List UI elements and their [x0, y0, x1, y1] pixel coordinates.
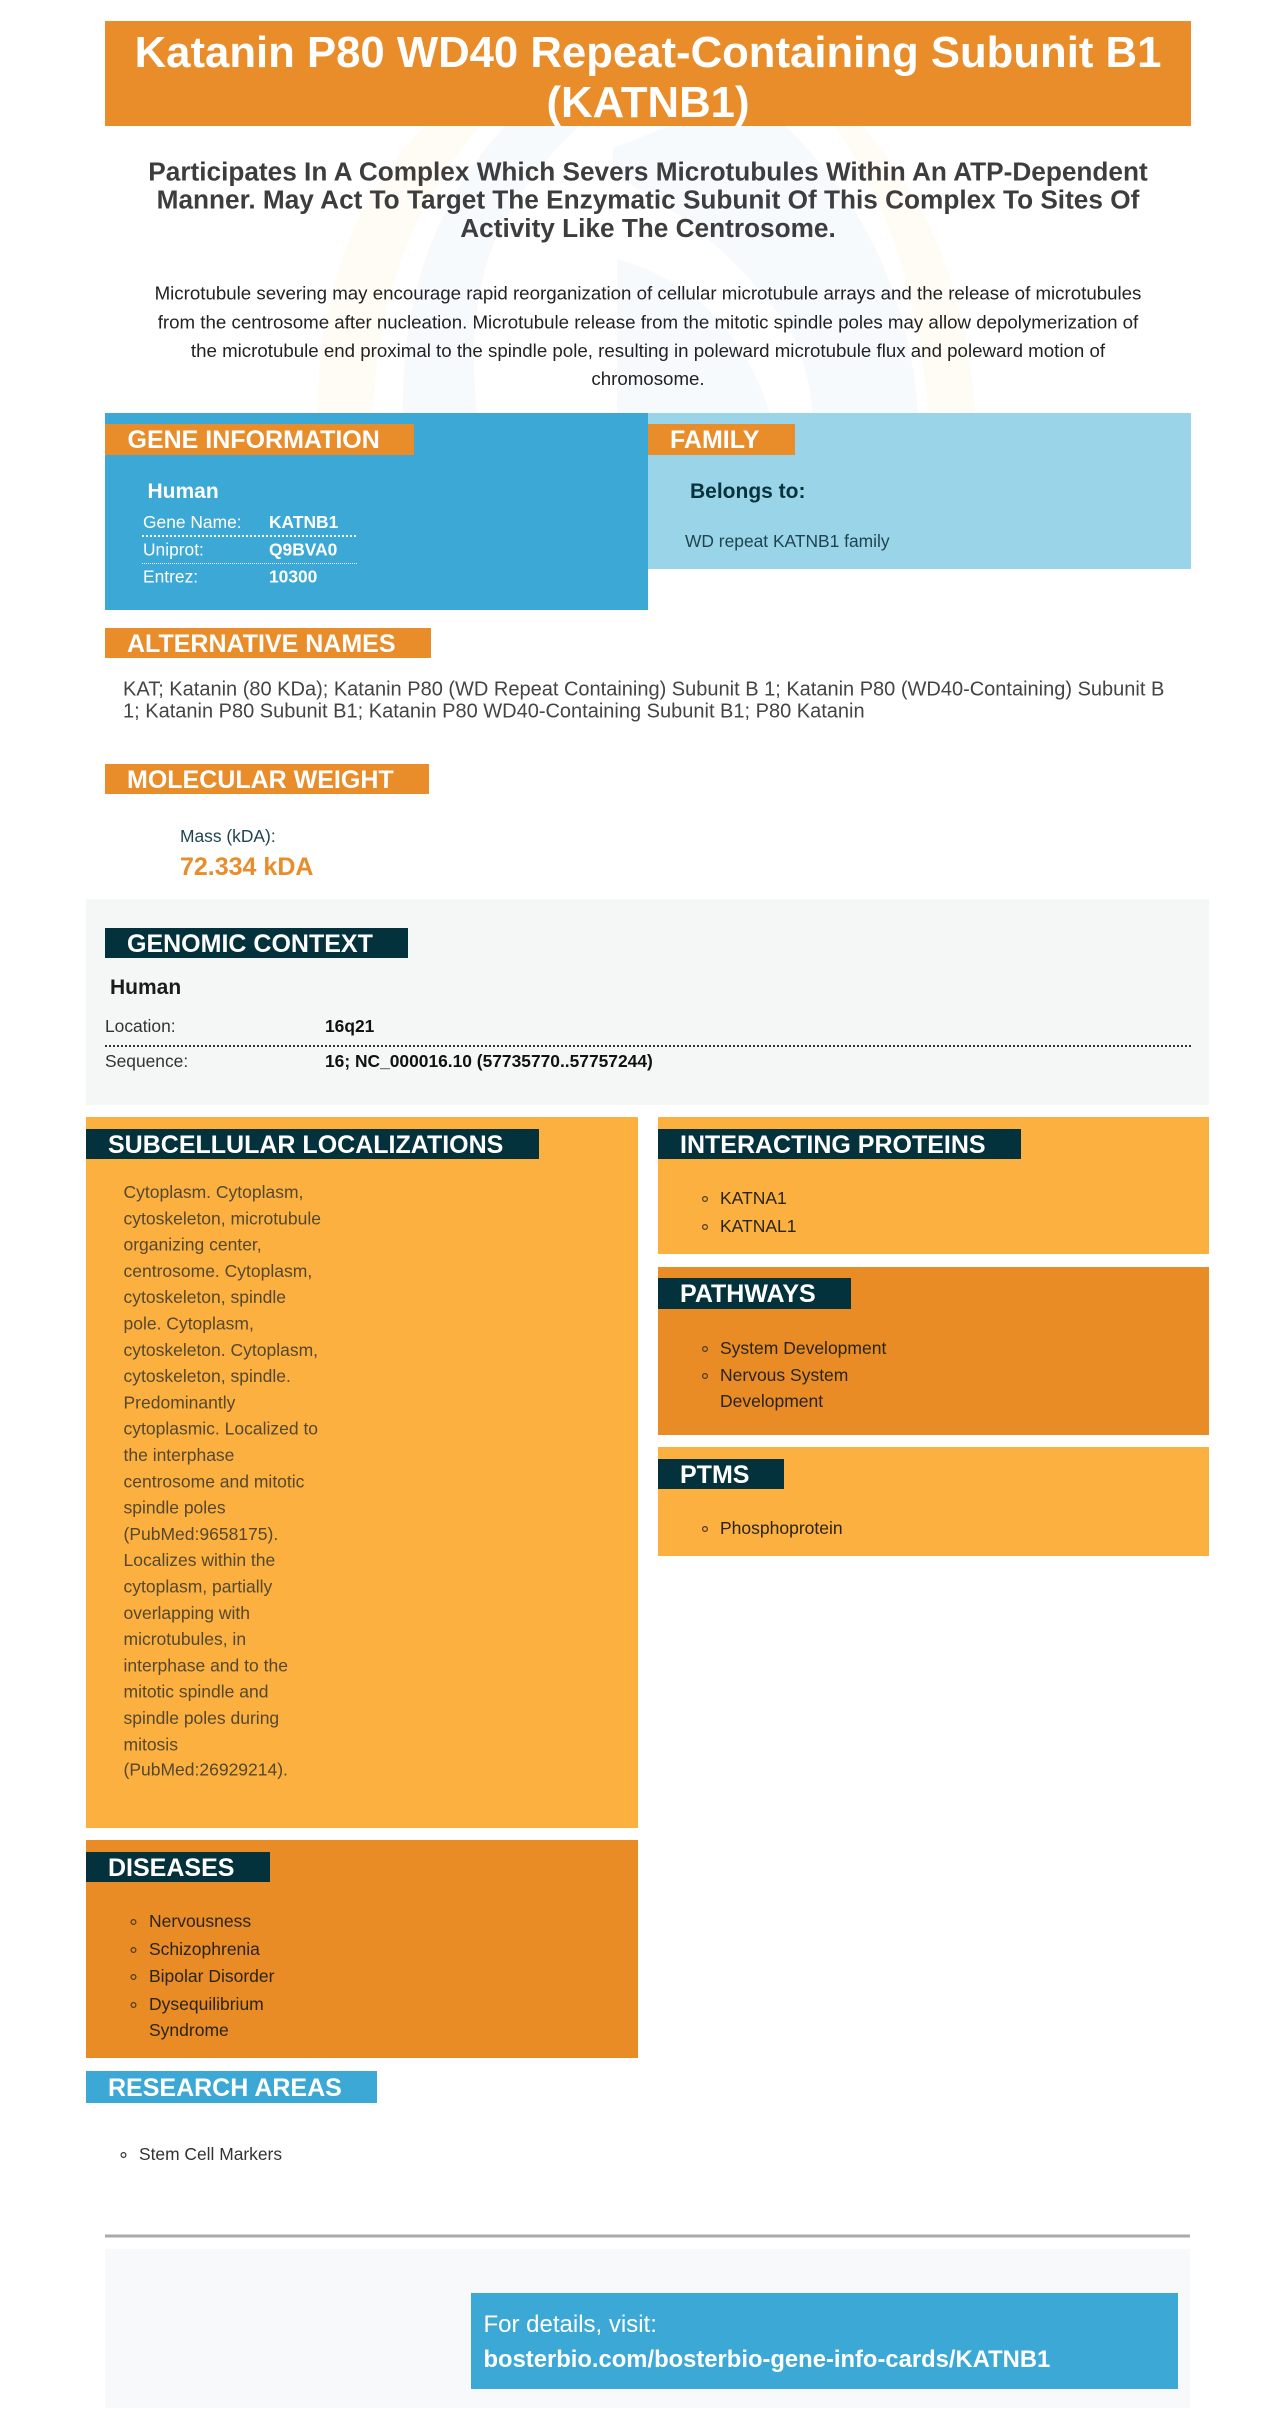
description text: Microtubule severing may encourage rapid reorganization of cellular microtubule arrays and the release of microtubules: [155, 282, 1141, 304]
heading: interacting proteins: INTERACTING PROTEINS: [680, 1131, 986, 1159]
heading: family: FAMILY: [670, 426, 760, 454]
callout: details link: bosterbio.com/bosterbio-gene-info-cards/KATNB1: [484, 2346, 1050, 2373]
localization text: the interphase: [124, 1445, 234, 1465]
heading: subcellular localizations: SUBCELLULAR LOCALIZATIONS: [108, 1131, 503, 1159]
panel: subcellular localizations: [86, 1117, 638, 1828]
species: human: Human: [110, 976, 181, 999]
research areas list: Stem Cell Markers: [139, 2144, 282, 2164]
subtitle: Activity Like The Centrosome.: [460, 213, 836, 243]
localization text: Cytoplasm. Cytoplasm,: [124, 1182, 303, 1202]
disease list: Bipolar Disorder: [149, 1966, 275, 1986]
pathway list: Nervous System: [720, 1365, 848, 1385]
callout: details link: For details, visit:: [484, 2311, 657, 2338]
subtitle: Participates In A Complex Which Severs Microtubules Within An ATP-Dependent: [148, 156, 1148, 186]
localization text: interphase and to the: [124, 1655, 288, 1675]
localization text: cytoskeleton, spindle: [124, 1287, 286, 1307]
PTM list: Phosphoprotein: [720, 1518, 843, 1538]
localization text: cytoskeleton, microtubule: [124, 1208, 321, 1228]
localization text: centrosome and mitotic: [124, 1471, 305, 1491]
localization text: microtubules, in: [124, 1629, 246, 1649]
heading: research areas: RESEARCH AREAS: [108, 2074, 342, 2102]
localization text: mitosis: [124, 1734, 178, 1754]
heading: alternative names: ALTERNATIVE NAMES: [127, 630, 396, 658]
panel: PTMs: [658, 1447, 1209, 1556]
panel: family: [648, 413, 1191, 569]
panel: footer: [105, 2249, 1190, 2408]
gene info table: KATNB1: [269, 512, 339, 532]
molecular weight value: 72.334 kDA: [180, 853, 313, 881]
belongs to label: Belongs to:: [690, 480, 806, 503]
molecular weight value: Mass (kDA):: [180, 826, 276, 846]
heading: PTMs: [658, 1459, 784, 1489]
localization text: (PubMed:26929214).: [124, 1760, 288, 1780]
localization text: overlapping with: [124, 1603, 250, 1623]
heading: genomic context: GENOMIC CONTEXT: [127, 930, 373, 958]
localization text: spindle poles: [124, 1498, 226, 1518]
subtitle: [148, 156, 1148, 243]
alternative names text: 1; Katanin P80 Subunit B1; Katanin P80 WD40-Containing Subunit B1; P80 Katanin: [123, 700, 865, 722]
title banner: Katanin P80 WD40 Repeat-Containing Subunit B1: [135, 28, 1161, 77]
localization text: organizing center,: [124, 1235, 262, 1255]
localization text: cytoplasm, partially: [124, 1576, 273, 1596]
localization text: [124, 1182, 321, 1780]
localization text: Predominantly: [124, 1392, 236, 1412]
localization text: spindle poles during: [124, 1708, 279, 1728]
panel: gene information: [105, 413, 648, 610]
heading: pathways: PATHWAYS: [680, 1280, 816, 1308]
protein list: [703, 1188, 797, 1236]
panel: pathways: [658, 1267, 1209, 1435]
protein list: KATNAL1: [720, 1216, 797, 1236]
heading: PTMs: PTMS: [680, 1461, 749, 1489]
panel: interacting proteins: [658, 1117, 1209, 1254]
gene info table: Q9BVA0: [269, 540, 337, 560]
disease list: Nervousness: [149, 1911, 251, 1931]
description text: from the centrosome after nucleation. Microtubule release from the mitotic spindle poles may allow depolymerization of: [158, 312, 1139, 332]
disease list: Syndrome: [149, 2020, 229, 2040]
protein list: KATNA1: [720, 1188, 787, 1208]
pathway list: System Development: [720, 1338, 886, 1358]
genomic table: 16q21: [325, 1016, 375, 1036]
subtitle: Manner. May Act To Target The Enzymatic Subunit Of This Complex To Sites Of: [157, 184, 1140, 214]
alternative names text: [123, 678, 1164, 722]
family value: WD repeat KATNB1 family: [685, 531, 890, 551]
title banner: (KATNB1): [546, 78, 750, 127]
title banner: [105, 21, 1191, 127]
localization text: cytoskeleton. Cytoplasm,: [124, 1340, 318, 1360]
localization text: cytoskeleton, spindle.: [124, 1366, 291, 1386]
alternative names text: KAT; Katanin (80 KDa); Katanin P80 (WD Repeat Containing) Subunit B 1; Katanin P80 (WD40-Containing) Subunit B: [123, 678, 1164, 700]
gene info table: Entrez:: [143, 566, 198, 586]
localization text: mitotic spindle and: [124, 1682, 268, 1702]
description text: the microtubule end proximal to the spindle pole, resulting in poleward microtubule flux and poleward motion of: [191, 340, 1106, 361]
genomic table: 16; NC_000016.10 (57735770..57757244): [325, 1051, 653, 1071]
pathway list: [703, 1338, 886, 1411]
genomic table: Location:: [105, 1016, 176, 1036]
localization text: centrosome. Cytoplasm,: [124, 1261, 312, 1281]
heading: pathways: [658, 1278, 851, 1309]
genomic table: Sequence:: [105, 1051, 188, 1071]
panel: diseases: [86, 1840, 638, 2058]
localization text: (PubMed:9658175).: [124, 1524, 278, 1544]
description text: [155, 282, 1141, 389]
heading: family: [648, 424, 795, 455]
pathway list: Development: [720, 1391, 823, 1411]
panel: genomic context: [86, 899, 1209, 1105]
gene info table: Uniprot:: [143, 540, 204, 560]
localization text: Localizes within the: [124, 1550, 275, 1570]
gene info table: 10300: [269, 566, 317, 586]
heading: gene information: GENE INFORMATION: [128, 426, 380, 454]
gene info table: [142, 512, 357, 586]
gene info table: Gene Name:: [143, 512, 242, 532]
disease list: Dysequilibrium: [149, 1994, 264, 2014]
watermark logo: [317, 126, 975, 413]
localization text: pole. Cytoplasm,: [124, 1314, 254, 1334]
localization text: cytoplasmic. Localized to: [124, 1419, 318, 1439]
genomic table: [105, 1016, 1191, 1071]
molecular weight value: [180, 826, 313, 881]
species: human: Human: [148, 480, 219, 503]
heading: molecular weight: MOLECULAR WEIGHT: [127, 766, 394, 794]
heading: diseases: [86, 1852, 270, 1882]
heading: diseases: DISEASES: [108, 1854, 234, 1882]
description text: chromosome.: [591, 368, 705, 389]
disease list: Schizophrenia: [149, 1939, 260, 1959]
disease list: [131, 1911, 275, 2040]
callout: details link: [471, 2293, 1178, 2389]
